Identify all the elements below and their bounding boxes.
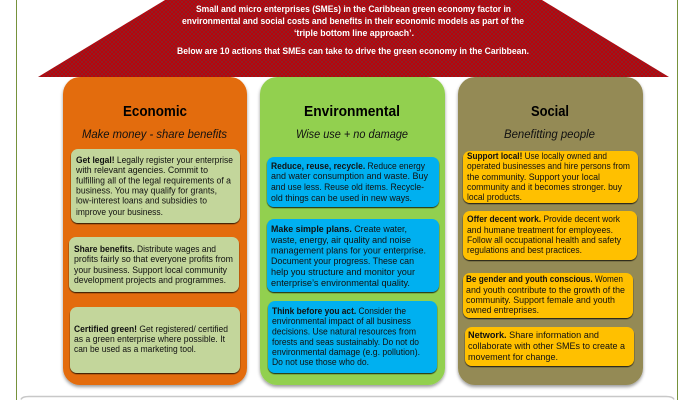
subheading: social: Benefitting people <box>504 129 595 141</box>
card: network: collaborate with other SMEs to create a <box>468 341 625 351</box>
card: get legal <box>71 149 240 223</box>
subheading: environmental: Wise use + no damage <box>296 129 408 141</box>
card: certified green: as a green enterprise where possible. It <box>74 334 225 344</box>
roof intro text: Small and micro enterprises (SMEs) in the Caribbean green economy factor in <box>196 4 511 14</box>
card: get legal: low-interest loans and subsidies to <box>76 196 207 206</box>
panel: social <box>458 77 643 385</box>
card: make simple plans: waste, energy, air quality and noise <box>270 235 411 245</box>
card: make simple plans: help you structure and monitor your <box>271 267 415 277</box>
card: reduce reuse recycle <box>267 157 439 207</box>
card: offer decent work <box>463 211 637 260</box>
card: think before you act: environmental impact of all business <box>272 316 411 326</box>
card: offer decent work: regulations and best practices. <box>467 245 582 255</box>
card: reduce reuse recycle: Reduce, reuse, recycle. Reduce energy <box>271 161 425 171</box>
card: share benefits <box>69 237 239 292</box>
card: network: movement for change. <box>468 352 558 362</box>
card: certified green: can be used as a marketing tool. <box>74 344 196 354</box>
panel: environmental <box>260 77 445 385</box>
roof banner <box>38 0 669 77</box>
roof intro text: Below are 10 actions that SMEs can take to drive the green economy in the Caribbean. <box>177 46 529 56</box>
card: offer decent work: and humane treatment for employees. <box>467 225 613 235</box>
card: make simple plans <box>267 219 439 292</box>
roof intro text: ‘triple bottom line approach’. <box>294 28 414 38</box>
card: think before you act: decisions. Use natural resources from <box>272 326 416 336</box>
card: think before you act <box>268 301 437 373</box>
card: support local: operated businesses and hire persons from <box>467 161 630 171</box>
card: offer decent work: Offer decent work. Provide decent work <box>467 214 620 224</box>
heading: social: Social <box>531 103 569 120</box>
card: network: Network. Share information and <box>468 330 599 340</box>
card: get legal: Get legal! Legally register your enterprise <box>76 155 233 165</box>
card: certified green <box>70 307 240 373</box>
heading: economic: Economic <box>123 103 187 120</box>
card: make simple plans: Make simple plans. Create water, <box>271 224 407 234</box>
card: get legal: business. You may qualify for grants, <box>76 186 217 196</box>
card: get legal: fulfilling all of the legal requirements of a <box>76 176 231 186</box>
card: gender and youth: owned entreprises. <box>466 305 539 315</box>
card: support local: the community. Support your local <box>467 172 600 182</box>
card: make simple plans: Document your progress. These can <box>271 256 414 266</box>
card: certified green: Certified green! Get registered/ certified <box>74 324 228 334</box>
card: gender and youth: and youth contribute to the growth of the <box>466 285 625 295</box>
card: support local: Support local! Use locally owned and <box>467 151 607 161</box>
card: share benefits: development projects and programmes. <box>74 275 226 285</box>
card: think before you act: environmental damage (e.g. pollution). <box>272 347 420 357</box>
card: network <box>465 327 634 366</box>
panel: economic <box>63 77 247 385</box>
card: share benefits: profits fairly so that everyone profits from <box>74 254 233 264</box>
card: gender and youth: community. Support female and youth <box>466 295 615 305</box>
card: offer decent work: Follow all occupational health and safety <box>467 235 621 245</box>
card: support local: local products. <box>467 192 522 202</box>
card: share benefits: Share benefits. Distribute wages and <box>74 244 216 254</box>
card: share benefits: your business. Support local community <box>74 265 227 275</box>
card: think before you act: forests and seas sustainably. Do not do <box>272 337 419 347</box>
card: get legal: with relevant agencies. Commit to <box>75 165 208 175</box>
card: support local <box>463 151 638 203</box>
card: reduce reuse recycle: and use less. Reuse old items. Recycle- <box>271 182 424 192</box>
roof intro text: environmental and social costs and benefits in their economic models as part of the <box>182 16 524 26</box>
card: reduce reuse recycle: old things can be used in new ways. <box>271 193 412 203</box>
bottom panel edge <box>21 396 674 400</box>
card: reduce reuse recycle: and water consumption and waste. Buy <box>271 171 428 181</box>
roof intro text <box>177 4 529 56</box>
heading: environmental: Environmental <box>304 103 400 120</box>
card: get legal: improve your business. <box>76 207 163 217</box>
card: think before you act: Think before you act. Consider the <box>272 306 406 316</box>
card: make simple plans: enterprise’s environmental quality. <box>271 278 410 288</box>
card: support local: community and it becomes stronger. buy <box>467 182 622 192</box>
card: make simple plans: management plans for your enterprise. <box>271 246 426 256</box>
card: think before you act: Do not use those who do. <box>272 357 369 367</box>
card: gender and youth <box>463 273 633 318</box>
card: gender and youth: Be gender and youth conscious. Women <box>466 274 623 284</box>
subheading: economic: Make money - share benefits <box>82 129 227 141</box>
